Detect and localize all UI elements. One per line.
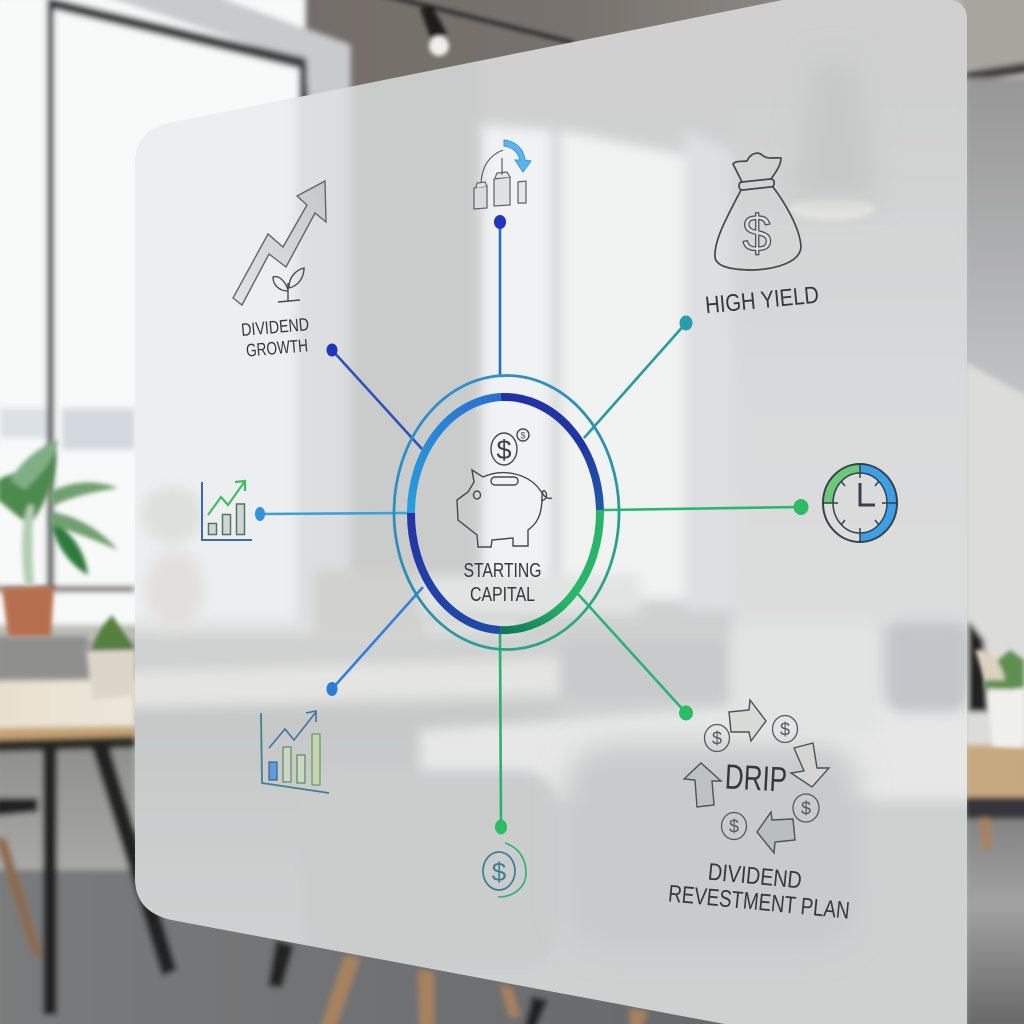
label: starting capital: STARTING xyxy=(464,559,542,582)
label: high yield: HIGH YIELD xyxy=(704,282,820,319)
connector end dots xyxy=(255,215,808,834)
label: dividend growth xyxy=(242,318,308,356)
label: dividend reinvestment plan: REVESTMENT PLAN xyxy=(667,880,851,925)
label: dividend reinvestment plan xyxy=(669,863,849,918)
icon: DRIP reinvestment cycle: $ xyxy=(729,816,739,836)
label: dividend reinvestment plan: DIVIDEND xyxy=(707,859,803,894)
label: starting capital xyxy=(464,563,540,601)
connector lines xyxy=(260,222,801,827)
label: dividend growth: GROWTH xyxy=(245,335,309,361)
icon: small bar chart with green arrow xyxy=(202,481,252,540)
icon: DRIP reinvestment cycle: $ xyxy=(801,798,811,818)
icon: larger bar chart xyxy=(261,711,329,793)
icon: bars with reinvest arrow xyxy=(474,140,531,209)
icon: piggy bank with coins: $ xyxy=(496,435,512,465)
icon: dollar coin: $ xyxy=(492,857,507,887)
icon: DRIP reinvestment cycle: $ xyxy=(780,720,790,740)
icon: clock xyxy=(823,464,897,542)
icon: piggy bank with coins xyxy=(457,429,552,547)
label: starting capital: CAPITAL xyxy=(470,583,535,606)
icon: piggy bank with coins: $ xyxy=(520,430,526,440)
central hub rings xyxy=(394,376,619,650)
icon: money bag xyxy=(715,153,801,270)
icon: DRIP reinvestment cycle: $ xyxy=(712,728,722,748)
icon: DRIP reinvestment cycle: DRIP xyxy=(724,757,788,800)
icon: rising arrow with sprout xyxy=(233,181,326,305)
icon: money bag: $ xyxy=(743,205,772,263)
label: dividend growth: DIVIDEND xyxy=(240,314,310,340)
icon: DRIP reinvestment cycle xyxy=(684,700,829,853)
icon: dollar coin xyxy=(483,843,526,897)
